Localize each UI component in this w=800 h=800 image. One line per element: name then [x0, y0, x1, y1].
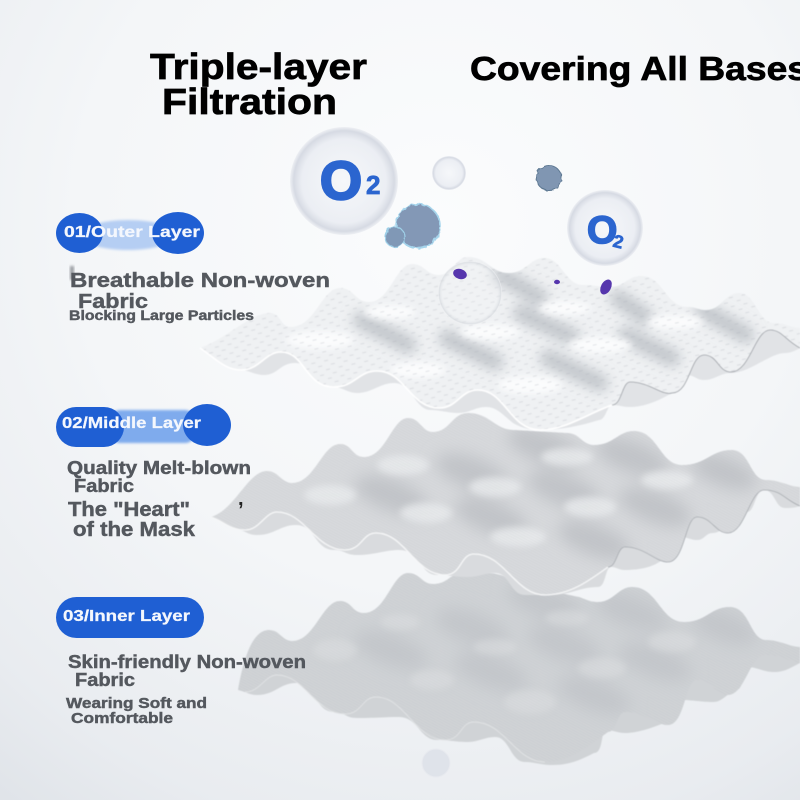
text block: middle layer: [67, 458, 251, 541]
title: Covering All Bases: Covering All Bases: [470, 50, 800, 87]
text block: middle layer: Quality Melt-blown: [67, 458, 251, 478]
fabric layer 1: outer: [200, 255, 800, 435]
pill: 03/Inner Layer: 03/Inner Layer: [63, 608, 190, 625]
empty bubble top: [432, 156, 466, 190]
text block: middle layer: of the Mask: [73, 519, 196, 541]
text block: outer layer: Breathable Non-woven: [70, 270, 330, 292]
dust particles: [385, 166, 562, 248]
pill: 03/Inner Layer: [56, 597, 204, 638]
empty bubble bottom: [422, 749, 450, 777]
text block: middle layer: Fabric: [74, 476, 134, 496]
text block: outer layer: [69, 266, 330, 323]
fabric layer 2: middle: [200, 410, 800, 600]
O2 bubble large: [290, 127, 398, 235]
O2 bubble large: O: [320, 151, 362, 211]
O2 bubble small: [567, 190, 643, 266]
pill: 01/Outer Layer: 01/Outer Layer: [64, 224, 200, 241]
O2 bubble small: 2: [611, 231, 626, 253]
purple particles: [452, 267, 614, 296]
text block: inner layer: Skin-friendly Non-woven: [68, 652, 306, 672]
text block: inner layer: Wearing Soft and: [66, 695, 207, 712]
text block: inner layer: [66, 652, 306, 727]
text block: outer layer: Blocking Large Particles: [69, 308, 254, 323]
text block: middle layer: The "Heart": [68, 499, 190, 521]
title: Triple-layer Filtration: [150, 46, 367, 122]
fabric layer 3: inner: [230, 565, 800, 770]
title: Triple-layer Filtration: Triple-layer: [150, 46, 367, 87]
title: Triple-layer Filtration: Filtration: [162, 81, 337, 122]
text block: inner layer: Fabric: [75, 670, 135, 690]
text block: outer layer: Fabric: [78, 291, 148, 313]
text block: inner layer: Comfortable: [71, 710, 173, 727]
pill: 01/Outer Layer: [56, 212, 204, 254]
pill: 02/Middle Layer: [56, 404, 231, 447]
O2 bubble small: O: [587, 209, 617, 252]
O2 bubble large: 2: [366, 170, 380, 200]
pill: 02/Middle Layer: 02/Middle Layer: [62, 415, 201, 432]
stray comma mark: ,: [238, 488, 244, 510]
bubble on fabric: [438, 261, 502, 325]
